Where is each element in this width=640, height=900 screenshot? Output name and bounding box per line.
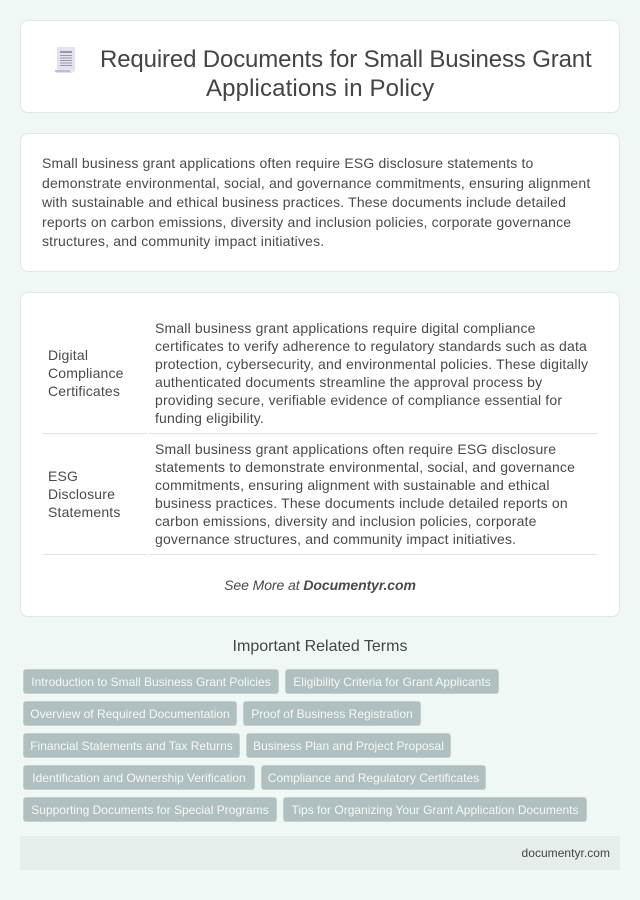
tag [283, 797, 587, 822]
intro text [42, 155, 590, 249]
tag: Tips for Organizing Your Grant Application Documents [291, 803, 579, 817]
tag [23, 669, 279, 694]
row label: Digital Compliance Certificates: Digital [48, 347, 88, 363]
intro text: Small business grant applications often require ESG disclosure statements to [42, 155, 534, 171]
intro text: structures, and community impact initiatives. [42, 233, 324, 249]
tag: Overview of Required Documentation [30, 707, 230, 721]
row text: ESG Disclosure Statements: commitments, ensuring alignment with sustainable and ethical [155, 477, 550, 493]
row label: ESG Disclosure Statements: Statements [48, 504, 121, 520]
row text: Digital Compliance Certificates [155, 320, 588, 426]
tag [23, 701, 237, 726]
panel: documents table [20, 292, 620, 617]
row label: ESG Disclosure Statements [48, 468, 121, 520]
icon: document scroll [55, 47, 75, 72]
tag: Proof of Business Registration [251, 707, 413, 721]
tag: Business Plan and Project Proposal [253, 739, 444, 753]
title: Applications in Policy [206, 75, 434, 102]
tag [23, 733, 240, 758]
row text: Digital Compliance Certificates: providing secure, verifiable evidence of compliance essential for [155, 392, 562, 408]
row text: ESG Disclosure Statements: Small business grant applications often require ESG disclosure [155, 441, 556, 457]
row text: Digital Compliance Certificates: funding eligibility. [155, 410, 264, 426]
row text: Digital Compliance Certificates: authenticated documents streamline the approval process by [155, 374, 542, 390]
footer text: documentyr.com [522, 846, 610, 860]
tag [246, 733, 451, 758]
row label: ESG Disclosure Statements: Disclosure [48, 486, 115, 502]
intro text: demonstrate environmental, social, and governance commitments, ensuring alignment [42, 175, 590, 191]
tag: Identification and Ownership Verification [32, 771, 246, 785]
title [100, 46, 592, 102]
row label: ESG Disclosure Statements: ESG [48, 468, 78, 484]
tag [23, 765, 255, 790]
row label: Digital Compliance Certificates: Compliance [48, 365, 124, 381]
row label: Digital Compliance Certificates [48, 347, 124, 399]
row text: Digital Compliance Certificates: Small business grant applications require digital compliance [155, 320, 536, 336]
see more link: See More at Documentyr.com [224, 577, 416, 593]
tag: Financial Statements and Tax Returns [30, 739, 233, 753]
tag: Supporting Documents for Special Programs [31, 803, 269, 817]
row text: ESG Disclosure Statements [155, 441, 575, 547]
row text: ESG Disclosure Statements: business practices. These documents include detailed reports on [155, 495, 568, 511]
intro text: with sustainable and ethical business practices. These documents include detailed [42, 194, 566, 210]
row text: Digital Compliance Certificates: protection, cybersecurity, and environmental policies. These digitally [155, 356, 588, 372]
heading: important related terms: Important Related Terms [233, 638, 407, 655]
tag: Introduction to Small Business Grant Policies [31, 675, 271, 689]
row text: ESG Disclosure Statements: carbon emissions, diversity and inclusion policies, corporate [155, 513, 537, 529]
row text: Digital Compliance Certificates: certificates to verify adherence to regulatory standards such as data [155, 338, 587, 354]
panel: introduction [20, 133, 620, 272]
title: Required Documents for Small Business Grant [100, 46, 592, 73]
row text: ESG Disclosure Statements: governance structures, and community impact initiatives. [155, 531, 516, 547]
tag [243, 701, 421, 726]
tag: Eligibility Criteria for Grant Applicants [293, 675, 491, 689]
footer bar [20, 836, 620, 870]
related terms tags [23, 669, 587, 822]
tag [261, 765, 486, 790]
tag [23, 797, 277, 822]
tag: Compliance and Regulatory Certificates [268, 771, 479, 785]
row text: ESG Disclosure Statements: statements to demonstrate environmental, social, and governance [155, 459, 575, 475]
intro text: reports on carbon emissions, diversity and inclusion policies, corporate governance [42, 214, 571, 230]
tag [285, 669, 499, 694]
row label: Digital Compliance Certificates: Certificates [48, 383, 120, 399]
panel: title header [20, 20, 620, 113]
